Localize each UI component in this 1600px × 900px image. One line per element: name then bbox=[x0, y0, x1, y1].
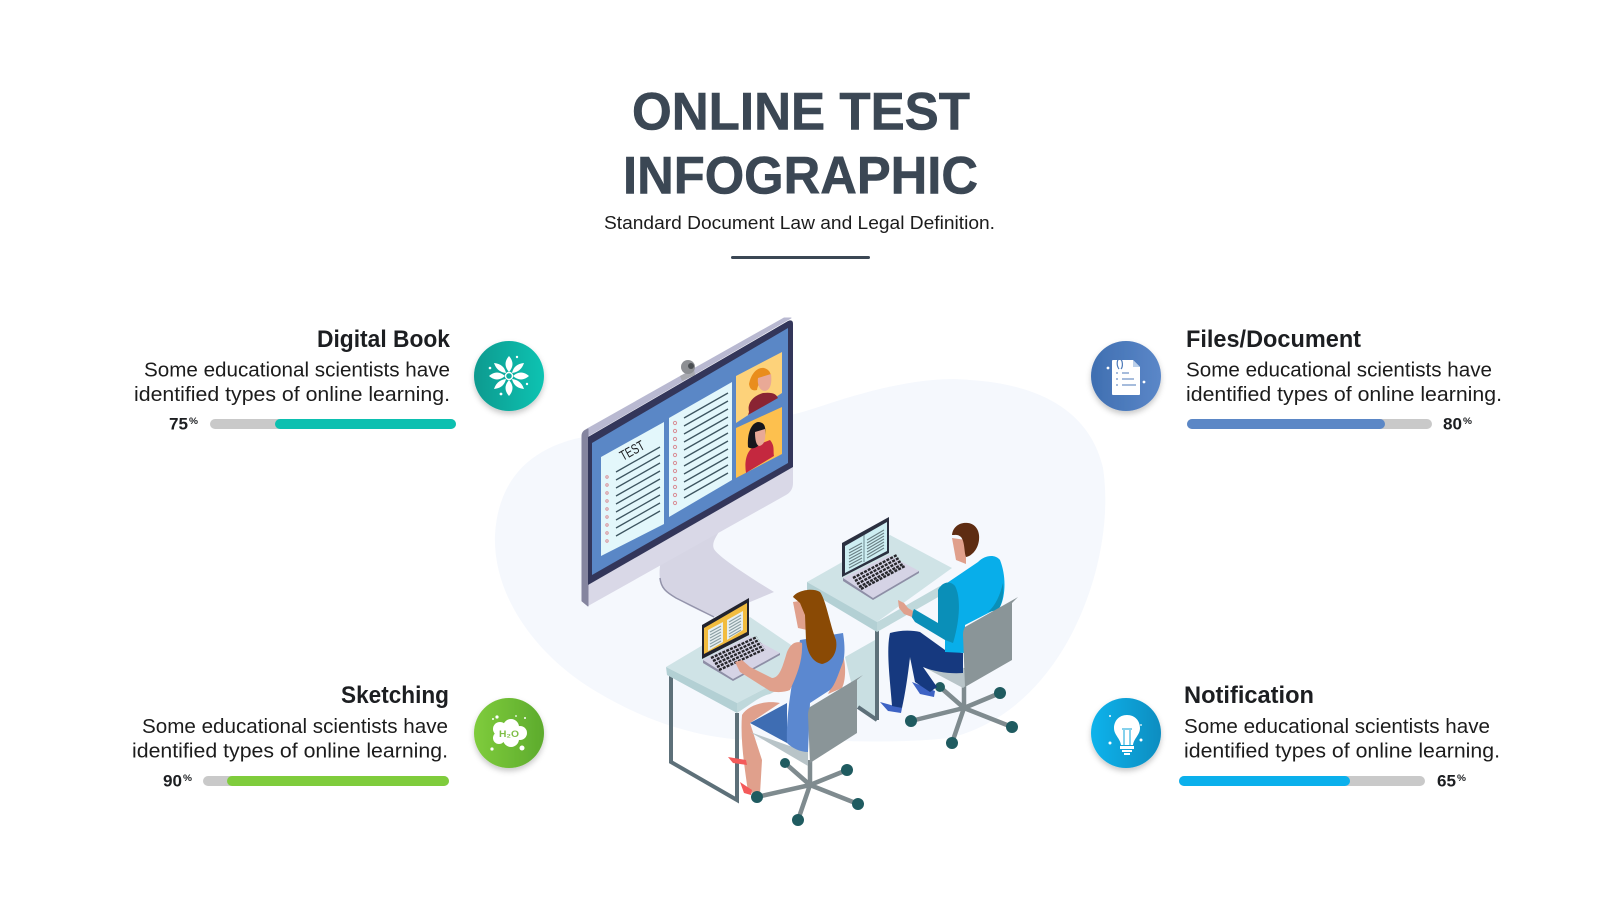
value: % bbox=[1463, 416, 1472, 426]
value bbox=[1443, 416, 1472, 434]
monitor screen bbox=[592, 328, 788, 575]
desk 2 leg bbox=[875, 630, 879, 720]
illustration: monitor bbox=[582, 318, 793, 617]
monitor stand bbox=[660, 525, 774, 617]
man chair base bbox=[905, 668, 1018, 749]
title: ONLINE TEST bbox=[632, 82, 970, 142]
document right bbox=[669, 382, 732, 517]
man hand bbox=[898, 600, 913, 617]
description bbox=[1186, 358, 1502, 406]
progress bar 80% bbox=[1187, 419, 1432, 429]
video tile: top bbox=[736, 352, 782, 423]
description: identified types of online learning. bbox=[134, 383, 450, 406]
description: identified types of online learning. bbox=[1186, 383, 1502, 406]
heading: Notification bbox=[1184, 682, 1314, 709]
progress bar 75% bbox=[210, 419, 456, 429]
woman face bbox=[793, 600, 807, 630]
man torso bbox=[945, 556, 1004, 653]
laptop 2 bbox=[842, 517, 919, 600]
desk 1 top bbox=[666, 617, 816, 703]
panel: notification bbox=[1091, 682, 1500, 790]
text lines right bbox=[684, 393, 728, 498]
illustration: woman at desk bbox=[666, 590, 864, 826]
monitor rim bbox=[587, 318, 791, 436]
desk 1 legs bbox=[671, 675, 737, 800]
value: % bbox=[183, 773, 192, 783]
woman chair base bbox=[751, 758, 864, 826]
webcam bbox=[680, 360, 695, 381]
woman legs bbox=[742, 702, 780, 794]
title bbox=[623, 82, 978, 206]
value: 90 bbox=[163, 772, 182, 790]
illustration: man at desk bbox=[807, 517, 1018, 749]
description: Some educational scientists have bbox=[1184, 715, 1490, 738]
icon: h2o cloud: H₂O bbox=[499, 729, 519, 739]
icon: document bbox=[1091, 341, 1161, 411]
desk 2 top bbox=[807, 535, 952, 622]
panel: files document bbox=[1091, 326, 1502, 434]
man head bbox=[952, 523, 979, 564]
video tile: bottom bbox=[736, 407, 782, 478]
man chair back bbox=[963, 597, 1018, 687]
panel: digital book bbox=[134, 326, 544, 434]
woman far arm bbox=[828, 655, 845, 694]
text lines left bbox=[616, 447, 660, 536]
man trousers bbox=[888, 631, 963, 708]
monitor chin bbox=[588, 467, 793, 606]
description bbox=[1184, 715, 1500, 762]
man arm bbox=[911, 583, 959, 643]
desk 2 side panel bbox=[845, 640, 875, 718]
icon: light bulb bbox=[1091, 698, 1161, 768]
value: % bbox=[189, 416, 198, 426]
heading: Files/Document bbox=[1186, 326, 1361, 353]
woman chair back bbox=[808, 675, 863, 763]
background blob bbox=[495, 379, 1105, 741]
icon: h2o cloud bbox=[474, 698, 544, 768]
value: 65 bbox=[1437, 772, 1456, 790]
man seat bbox=[905, 652, 968, 688]
title: INFOGRAPHIC bbox=[623, 146, 978, 206]
description: Some educational scientists have bbox=[1186, 358, 1492, 382]
woman skirt bbox=[750, 703, 787, 743]
subtitle: Standard Document Law and Legal Definition. bbox=[604, 212, 995, 233]
check boxes bbox=[606, 421, 677, 542]
description: identified types of online learning. bbox=[1184, 740, 1500, 762]
icon: atom flower bbox=[474, 341, 544, 411]
test label: TEST bbox=[617, 437, 647, 464]
woman seat bbox=[750, 732, 808, 766]
heading: Sketching bbox=[341, 682, 449, 709]
description bbox=[134, 358, 450, 406]
panel: sketching bbox=[132, 682, 544, 790]
woman dress bbox=[787, 633, 844, 752]
description: Some educational scientists have bbox=[144, 358, 450, 382]
progress bar 65% bbox=[1179, 776, 1425, 786]
monitor frame bbox=[588, 320, 793, 585]
value bbox=[169, 416, 198, 434]
description: identified types of online learning. bbox=[132, 740, 448, 762]
value bbox=[1437, 772, 1466, 790]
value: % bbox=[1457, 773, 1466, 783]
man shoes bbox=[880, 682, 935, 713]
value: 80 bbox=[1443, 416, 1462, 434]
value bbox=[163, 772, 192, 790]
progress bar 90% bbox=[203, 776, 449, 786]
woman hair bbox=[793, 590, 836, 664]
document left bbox=[601, 422, 664, 556]
heading: Digital Book bbox=[317, 326, 451, 353]
description: Some educational scientists have bbox=[142, 715, 448, 738]
description bbox=[132, 715, 448, 762]
woman shoes bbox=[728, 757, 752, 795]
value: 75 bbox=[169, 416, 188, 434]
laptop 1 bbox=[702, 598, 780, 681]
woman arm bbox=[735, 642, 802, 692]
